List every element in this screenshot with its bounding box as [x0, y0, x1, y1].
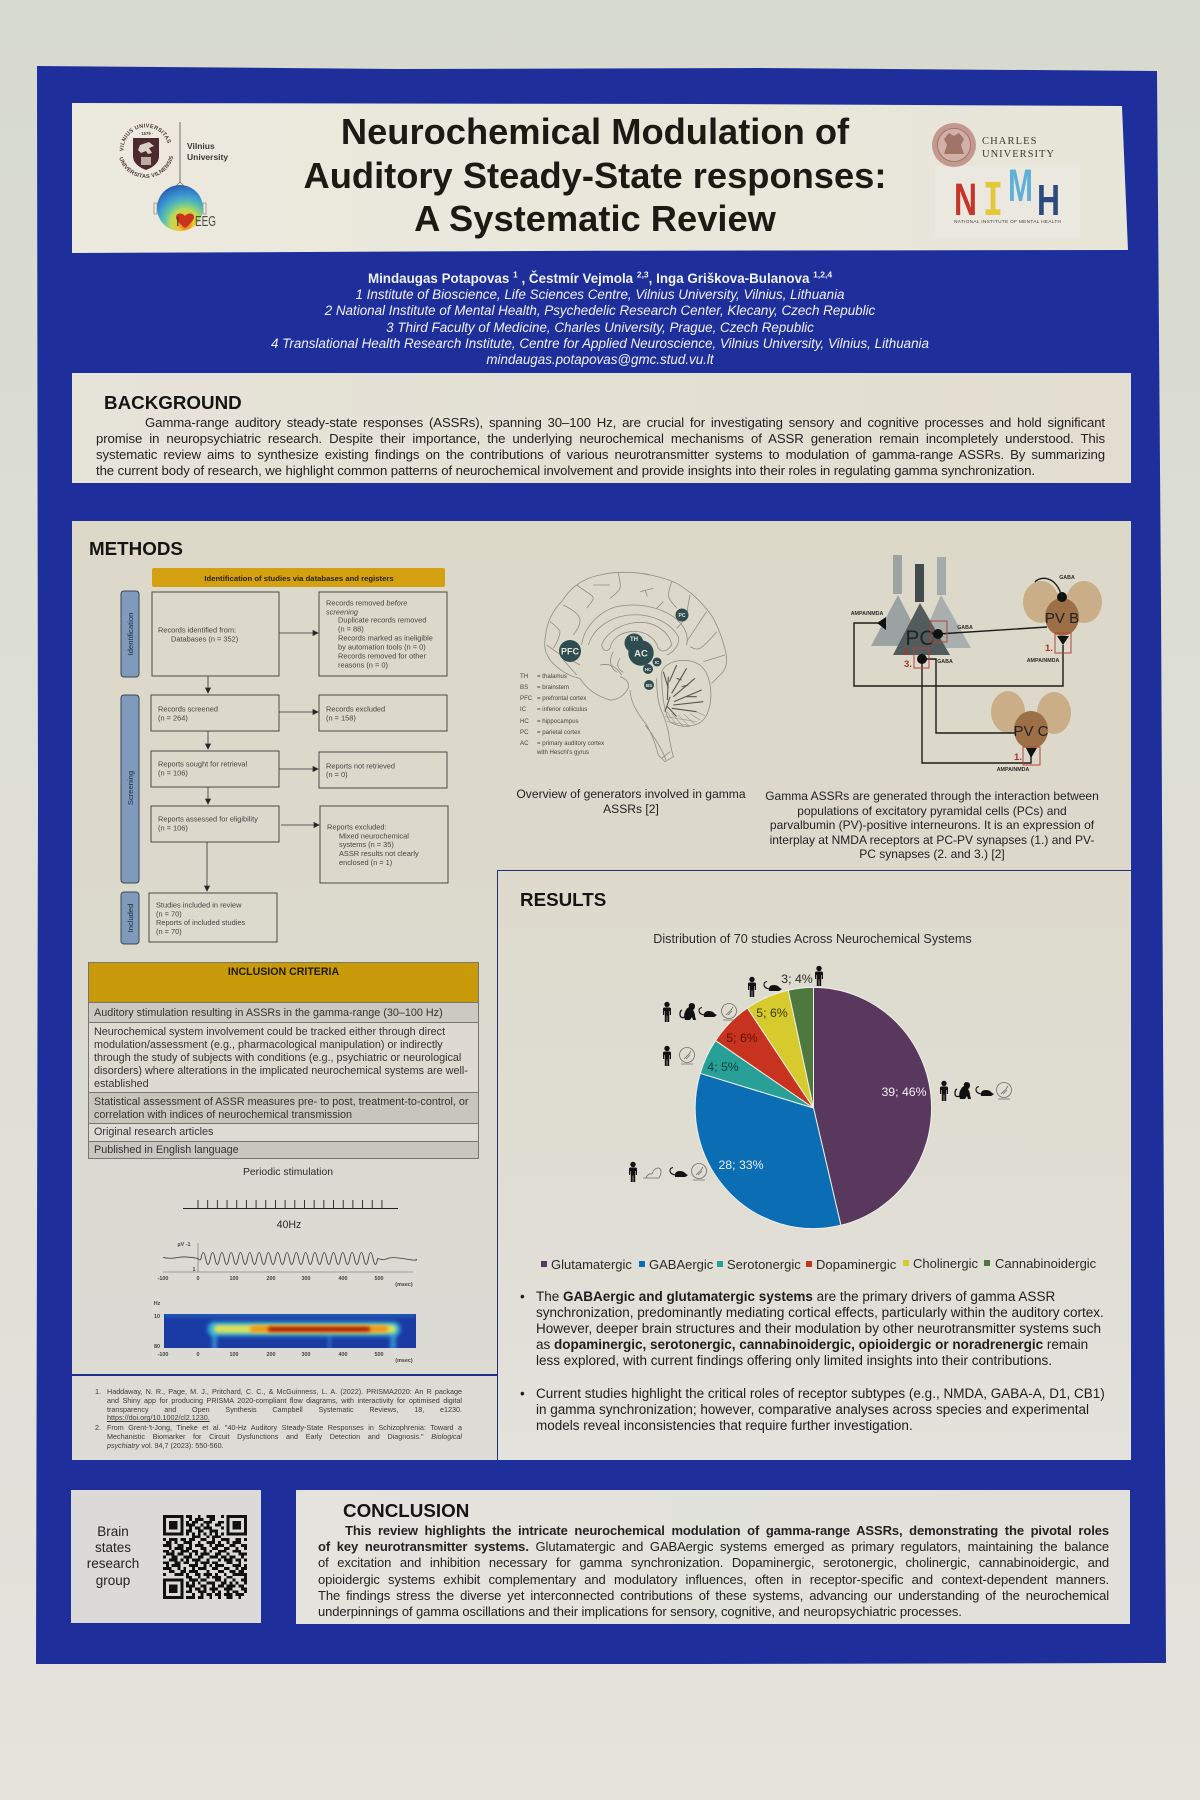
brain legend: BS [520, 684, 528, 691]
flow box text: Databases (n = 352) [171, 634, 238, 644]
spectrogram chart: 10 [154, 1314, 160, 1320]
conclusion body text: The findings stress the diverse yet interconnected contributions of these systems, advancing our understanding of the neurochemical [318, 1588, 1109, 1603]
flow box text: Reports not retrieved [326, 762, 395, 770]
pyramidal cells: PC [905, 627, 935, 650]
chart title: Distribution of 70 studies Across Neurochemical Systems [653, 932, 972, 946]
reference 2: From Grent-'t-Jong, Tineke et al. "40-Hz Auditory Steady-State Responses in Schizophrenia: Toward a [107, 1423, 462, 1432]
receptor labels: GABA [937, 659, 953, 665]
cerebellum folia [663, 665, 703, 717]
bullet 1: as dopaminergic, serotonergic, cannabinoidergic, opioidergic or noradrenergic remain [536, 1337, 1088, 1352]
label: periodic stimulation: Periodic stimulation [243, 1167, 333, 1178]
logo: NIMH: M [1008, 160, 1033, 211]
slice labels [707, 972, 927, 1172]
criterion 4 [89, 1123, 478, 1141]
heading: conclusion: CONCLUSION [343, 1500, 469, 1521]
species icons: GABAergic [629, 1162, 706, 1182]
species icons: dopaminergic [663, 1002, 736, 1022]
criterion 5 [89, 1141, 478, 1158]
pie slices [695, 987, 932, 1229]
QR code [163, 1515, 247, 1599]
flow box text: Records marked as ineligible [338, 634, 433, 642]
waveform chart: 200 [266, 1276, 276, 1282]
receptor labels: AMPA/NMDA [851, 611, 883, 617]
synapse numbers: 3. [904, 659, 912, 670]
spectrogram chart: 200 [266, 1352, 276, 1358]
logo: Vilnius University: · 1579 · [139, 131, 153, 136]
connections [854, 578, 1063, 763]
flow box text: (n = 264) [158, 714, 188, 722]
banner: Identification of studies via databases and registers [204, 574, 394, 583]
caption: circuit: interplay at NMDA receptors at PC-PV synapses (1.) and PV- [770, 833, 1094, 847]
background body text: promise in neuropsychiatric research. Despite their importance, the underlying neurochemical mechanisms of ASSR generation remain incompletely understood. This [96, 431, 1105, 446]
criterion 2: modulation/assessment (e.g., pharmacological manipulation) or indirectly [94, 1039, 443, 1051]
logo: NIMH: NATIONAL INSTITUTE OF MENTAL HEALTH [954, 219, 1062, 225]
affiliations: 1 Institute of Bioscience, Life Sciences Centre, Vilnius University, Vilnius, Lithuania [355, 287, 844, 302]
brain legend: = inferior colliculus [537, 706, 587, 713]
conclusion body text: opioidergic systems exhibit complementary and modulatory influences, often in receptor-specific and context-dependent manners. [318, 1572, 1109, 1587]
brain legend: HC [520, 718, 529, 725]
flow box text: Studies included in review [156, 900, 242, 910]
spectrogram chart: 300 [302, 1352, 310, 1358]
synapse numbers: 2. [903, 647, 911, 658]
flow box text: (n = 70) [156, 927, 182, 936]
flow box text: Records excluded [326, 704, 385, 714]
title text: Auditory Steady-State responses: [304, 154, 886, 196]
bullet 2: in gamma synchronization; however, comparative analyses across species and experimental [536, 1402, 1089, 1417]
authors and affiliations [271, 270, 929, 367]
brain legend: = prefrontal cortex [537, 695, 586, 702]
logo: NIMH: H [1037, 176, 1060, 225]
flow box text: Reports excluded: [327, 822, 387, 832]
panel: background [72, 373, 1131, 483]
bullet 1: The GABAergic and glutamatergic systems are the primary drivers of gamma ASSR [536, 1289, 1055, 1304]
panel: conclusion [296, 1490, 1130, 1624]
chart legend: Cannabinoidergic [995, 1256, 1097, 1271]
logo: I love EEG head map: I [176, 214, 180, 229]
heading: methods: METHODS [89, 538, 183, 559]
flow box text: Records identified from: [158, 626, 236, 634]
panel: QR group [71, 1490, 261, 1623]
banner [152, 568, 445, 587]
table header [89, 963, 478, 1002]
brain legend: PFC [520, 695, 533, 702]
generator labels: PC [679, 613, 686, 619]
brain legend: AC [520, 740, 529, 747]
bullet 1: However, deeper brain structures and their modulation by other neurotransmitter systems such [536, 1321, 1101, 1336]
criterion 2: established [94, 1078, 149, 1090]
synapse numbers: 1. [1045, 643, 1053, 654]
flow box text: screening [326, 608, 359, 616]
brain legend: with Heschl's gyrus [536, 749, 589, 756]
PV C interneuron [991, 691, 1071, 749]
chart legend: Serotonergic [727, 1257, 801, 1272]
brain legend: = parietal cortex [537, 729, 581, 736]
waveform chart: 0 [196, 1276, 200, 1282]
group name: Brain [97, 1524, 129, 1539]
conclusion body text: of excitation and inhibition necessary for gamma synchronization. Dopaminergic, serotonergic, cholinergic, cannabinoidergic, and [318, 1555, 1109, 1570]
background body text: systematic review aims to synthesize existing findings on the contributions of various neurotransmitter systems to modulation of gamma-range ASSRs. By summarizing [96, 447, 1105, 462]
brain legend [520, 673, 604, 756]
criterion 1: Auditory stimulation resulting in ASSRs in the gamma-range (30–100 Hz) [94, 1007, 443, 1019]
waveform chart: 300 [302, 1276, 310, 1282]
caption: circuit [765, 789, 1099, 861]
caption: generators [516, 787, 746, 816]
waveform chart: (msec) [395, 1282, 413, 1288]
slice labels: 3; 4% [781, 972, 813, 986]
PV B interneuron [1023, 581, 1102, 636]
criterion 3: Statistical assessment of ASSR measures pre- to post, treatment-to-control, or [94, 1096, 468, 1108]
affiliations: mindaugas.potapovas@gmc.stud.vu.lt [486, 352, 714, 367]
brain outline [545, 572, 727, 762]
reference 1 [95, 1387, 462, 1422]
table header: INCLUSION CRITERIA [228, 966, 339, 978]
flow box text: (n = 0) [326, 770, 348, 779]
group name [87, 1524, 139, 1588]
chart legend: GABAergic [649, 1257, 714, 1272]
flow box text: (n = 106) [158, 824, 188, 832]
flow box text: Reports of included studies [156, 918, 245, 927]
criterion 2 [89, 1022, 478, 1092]
group name: research [87, 1556, 139, 1571]
generator labels: TH [630, 637, 638, 643]
slice labels: 4; 5% [707, 1060, 739, 1074]
PV B interneuron: PV B [1045, 610, 1079, 627]
slice labels: 5; 6% [756, 1006, 788, 1020]
spectrogram chart: 100 [230, 1352, 238, 1358]
panel: results [497, 870, 1131, 1460]
slice labels: 5; 6% [726, 1031, 758, 1045]
logo: NIMH: N [954, 174, 977, 225]
chart legend: Cholinergic [913, 1256, 979, 1271]
synapses [877, 617, 1069, 758]
logo: Vilnius University: UNIVERSITAS VILNENSIS [120, 156, 173, 178]
conclusion body text [318, 1523, 1109, 1619]
brain legend: = thalamus [537, 673, 567, 680]
flow box text: Duplicate records removed [338, 616, 426, 624]
group name: states [95, 1540, 131, 1555]
logo: Vilnius University [120, 122, 228, 182]
logo: Vilnius University: University [187, 152, 228, 162]
waveform chart: 100 [230, 1276, 238, 1282]
waveform chart: 400 [338, 1276, 348, 1282]
flow box text: (n = 88) [338, 624, 364, 634]
brain generators diagram [520, 572, 728, 762]
stimulus train 40Hz [183, 1200, 398, 1231]
generator labels: PFC [561, 646, 580, 656]
neural circuit diagram [850, 555, 1102, 773]
flow box text: Reports assessed for eligibility [158, 814, 258, 824]
flow box text: (n = 158) [326, 714, 356, 722]
spectrogram chart: (msec) [395, 1358, 413, 1364]
slice labels: 39; 46% [881, 1085, 927, 1099]
bullet 1 [520, 1289, 1104, 1368]
brain legend: IC [520, 706, 527, 713]
flow box text [156, 598, 433, 936]
receptor labels: AMPA/NMDA [1027, 658, 1059, 664]
pie chart: neurochemical systems [629, 966, 1012, 1229]
results findings [520, 1289, 1105, 1433]
reference 1: 1. [95, 1387, 101, 1396]
affiliations: 3 Third Faculty of Medicine, Charles University, Prague, Czech Republic [386, 320, 814, 335]
criterion 3: correlation with indices of neurochemical transmission [94, 1109, 352, 1121]
flow boxes [149, 592, 448, 942]
logo: I love EEG head map [154, 182, 216, 231]
flow box text: reasons (n = 0) [338, 660, 388, 670]
bullet 2 [520, 1386, 1105, 1433]
generator labels: AC [634, 648, 648, 660]
title text: Neurochemical Modulation of [341, 111, 849, 152]
generator labels [561, 613, 686, 688]
spectrogram chart [154, 1301, 416, 1364]
reference 2 [95, 1423, 462, 1450]
waveform chart: 500 [374, 1276, 384, 1282]
flow box text: Records screened [158, 704, 218, 714]
flow box text: systems (n = 35) [339, 840, 394, 849]
caption: circuit: Gamma ASSRs are generated through the interaction between [765, 789, 1099, 803]
chart legend [541, 1256, 1097, 1272]
bullet 2: models reveal inconsistencies that require further investigation. [536, 1418, 913, 1433]
criterion 2: disorders) where alterations in the implicated neurochemical systems are well- [94, 1065, 468, 1077]
spectrogram chart: 80 [154, 1344, 160, 1350]
receptor labels: GABA [1059, 575, 1075, 581]
background body text: the current body of research, we highlight common patterns of neurochemical involvement and provide insights into their roles in regulating gamma synchronization. [96, 463, 1035, 478]
references [72, 1374, 497, 1459]
logo: Charles University: UNIVERSITY [982, 149, 1055, 160]
stage labels: Included [126, 904, 135, 932]
flow box text: Mixed neurochemical [339, 832, 409, 840]
conclusion body text: of key neurotransmitter systems. Glutamatergic and GABAergic systems emerged as primary regulators, maintaining the balance [318, 1539, 1109, 1554]
stage labels [121, 591, 139, 944]
stage labels: Screening [126, 771, 135, 805]
synapse numbers: 1. [1014, 752, 1022, 763]
criterion 2: through the study of subjects with conditions (e.g., psychiatric or neurological [94, 1052, 461, 1064]
brain legend: = primary auditory cortex [537, 740, 604, 747]
brain legend: = hippocampus [537, 718, 578, 725]
affiliations: 2 National Institute of Mental Health, Psychedelic Research Center, Klecany, Czech Republic [325, 303, 875, 318]
title text: A Systematic Review [414, 198, 776, 239]
caption: generators: Overview of generators involved in gamma [516, 787, 746, 801]
flow box text: (n = 70) [156, 910, 182, 918]
generator labels: BS [646, 683, 652, 688]
bullet 1: less explored, with current findings offering only limited insights into their contributions. [536, 1353, 1052, 1368]
logo: I love EEG head map: EEG [195, 213, 216, 230]
generator labels: HC [645, 667, 652, 672]
title text [304, 118, 883, 238]
inclusion criteria table [89, 963, 478, 1158]
flow box text: ASSR results not clearly [339, 849, 419, 858]
flow box text: Records removed for other [338, 652, 426, 660]
reference 2: psychiatry vol. 94,7 (2023): 550-560. [107, 1441, 224, 1450]
caption: generators: ASSRs [2] [603, 802, 659, 816]
authors: Mindaugas Potapovas 1 , Čestmír Vejmola 2,3, Inga Griškova-Bulanova 1,2,4 [368, 270, 832, 286]
logo: Vilnius University: VILNIUS UNIVERSITAS [120, 124, 171, 152]
waveform chart: µV -1 [178, 1242, 190, 1248]
species icons: glutamatergic [940, 1081, 1012, 1101]
criterion 1 [89, 1002, 478, 1022]
flow box text: Records removed before [326, 598, 407, 608]
caption: circuit: populations of excitatory pyramidal cells (PCs) and [797, 804, 1067, 818]
criterion 5: Published in English language [94, 1144, 239, 1156]
species icons: serotonergic [663, 1046, 694, 1066]
flow arrows [204, 630, 319, 891]
reference 2: 2. [95, 1423, 101, 1432]
logo: NIMH [954, 160, 1062, 231]
stimulus train 40Hz: 40Hz [277, 1219, 301, 1231]
pyramidal cells [871, 555, 971, 655]
logo: Charles University: CHARLES [982, 136, 1038, 147]
waveform chart: 1 [192, 1267, 196, 1273]
flow box text: by automation tools (n = 0) [338, 642, 426, 652]
background body text: Gamma-range auditory steady-state responses (ASSRs), spanning 30–100 Hz, are crucial for investigating sensory and cognitive processes and hold significant [145, 415, 1105, 430]
flow box text: enclosed (n = 1) [339, 858, 392, 867]
caption: circuit: PC synapses (2. and 3.) [2] [859, 847, 1005, 861]
spectrogram chart: 400 [338, 1352, 348, 1358]
stage labels: Identification [126, 613, 135, 655]
bullet 1: • [520, 1289, 525, 1304]
affiliations: 4 Translational Health Research Institute, Centre for Applied Neuroscience, Vilnius University, Vilnius, Lithuania [271, 336, 929, 351]
spectrogram chart: 0 [196, 1352, 200, 1358]
flow box text: Reports sought for retrieval [158, 760, 247, 768]
logo: Vilnius University: Vilnius [187, 141, 215, 151]
affiliations [271, 287, 929, 367]
brain legend: PC [520, 729, 529, 736]
conclusion body text: This review highlights the intricate neurochemical modulation of gamma-range ASSRs, demonstrating the pivotal roles [345, 1523, 1109, 1538]
waveform chart [158, 1242, 417, 1288]
brain legend: TH [520, 673, 528, 680]
bullet 2: • [520, 1386, 525, 1401]
generator nodes [559, 608, 688, 690]
panel: title [72, 103, 1128, 253]
PRISMA flow diagram [120, 568, 448, 944]
slice labels: 28; 33% [718, 1158, 764, 1172]
waveform chart: -100 [158, 1276, 168, 1282]
criterion 4: Original research articles [94, 1126, 213, 1138]
red synapse markers [914, 621, 1071, 765]
panel: methods and results [72, 521, 1131, 1460]
heading: background: BACKGROUND [104, 392, 242, 413]
logo: NIMH: I [983, 174, 1003, 231]
synapse numbers [903, 643, 1053, 763]
receptor labels [851, 575, 1075, 773]
background body text [96, 415, 1105, 478]
bullet 2: Current studies highlight the critical roles of receptor subtypes (e.g., NMDA, GABA-A, D1, CB1) [536, 1386, 1105, 1401]
reference 1: https://doi.org/10.1002/cl2.1230. [107, 1413, 210, 1422]
species icons: cholinergic [748, 977, 782, 997]
criterion 2: Neurochemical system involvement could be tracked either through direct [94, 1026, 445, 1038]
criterion 3 [89, 1092, 478, 1123]
species icons: cannabinoidergic [815, 966, 823, 986]
spectrogram chart: -100 [158, 1352, 168, 1358]
chart legend: Dopaminergic [816, 1257, 897, 1272]
PV C interneuron: PV C [1013, 723, 1049, 740]
generator labels: IC [655, 660, 660, 665]
spectrogram chart: Hz [154, 1301, 161, 1307]
chart legend: Glutamatergic [551, 1257, 632, 1272]
group name: group [96, 1573, 130, 1588]
reference 1: and Shiny app for producing PRISMA 2020-compliant flow diagrams, with interactivity for optimised digital [107, 1396, 462, 1405]
conclusion body text: underpinnings of gamma oscillations and their implications for sensory, cognitive, and neuropsychiatric processes. [318, 1604, 962, 1619]
spectrogram chart: 500 [374, 1352, 384, 1358]
reference 1: transparency and Open Synthesis Campbell Systematic Reviews, 18, e1230. [107, 1405, 462, 1414]
receptor labels: GABA [957, 625, 973, 631]
logo: Charles University [932, 123, 1055, 167]
caption: circuit: parvalbumin (PV)-positive interneurons. It is an expression of [770, 818, 1094, 832]
bullet 1: synchronization, predominantly mediating cortical effects, particularly within the auditory cortex. [536, 1305, 1104, 1320]
reference 1: Haddaway, N. R., Page, M. J., Pritchard, C. C., & McGuinness, L. A. (2022). PRISMA2020: An R package [107, 1387, 462, 1396]
heading: results: RESULTS [520, 889, 606, 910]
brain legend: = brainstem [537, 684, 569, 691]
flow box text: (n = 106) [158, 768, 188, 778]
receptor labels: AMPA/NMDA [997, 767, 1029, 773]
reference 2: Mechanistic Biomarker for Circuit Dysfunctions and Early Detection and Diagnosis." Biological [107, 1432, 462, 1441]
